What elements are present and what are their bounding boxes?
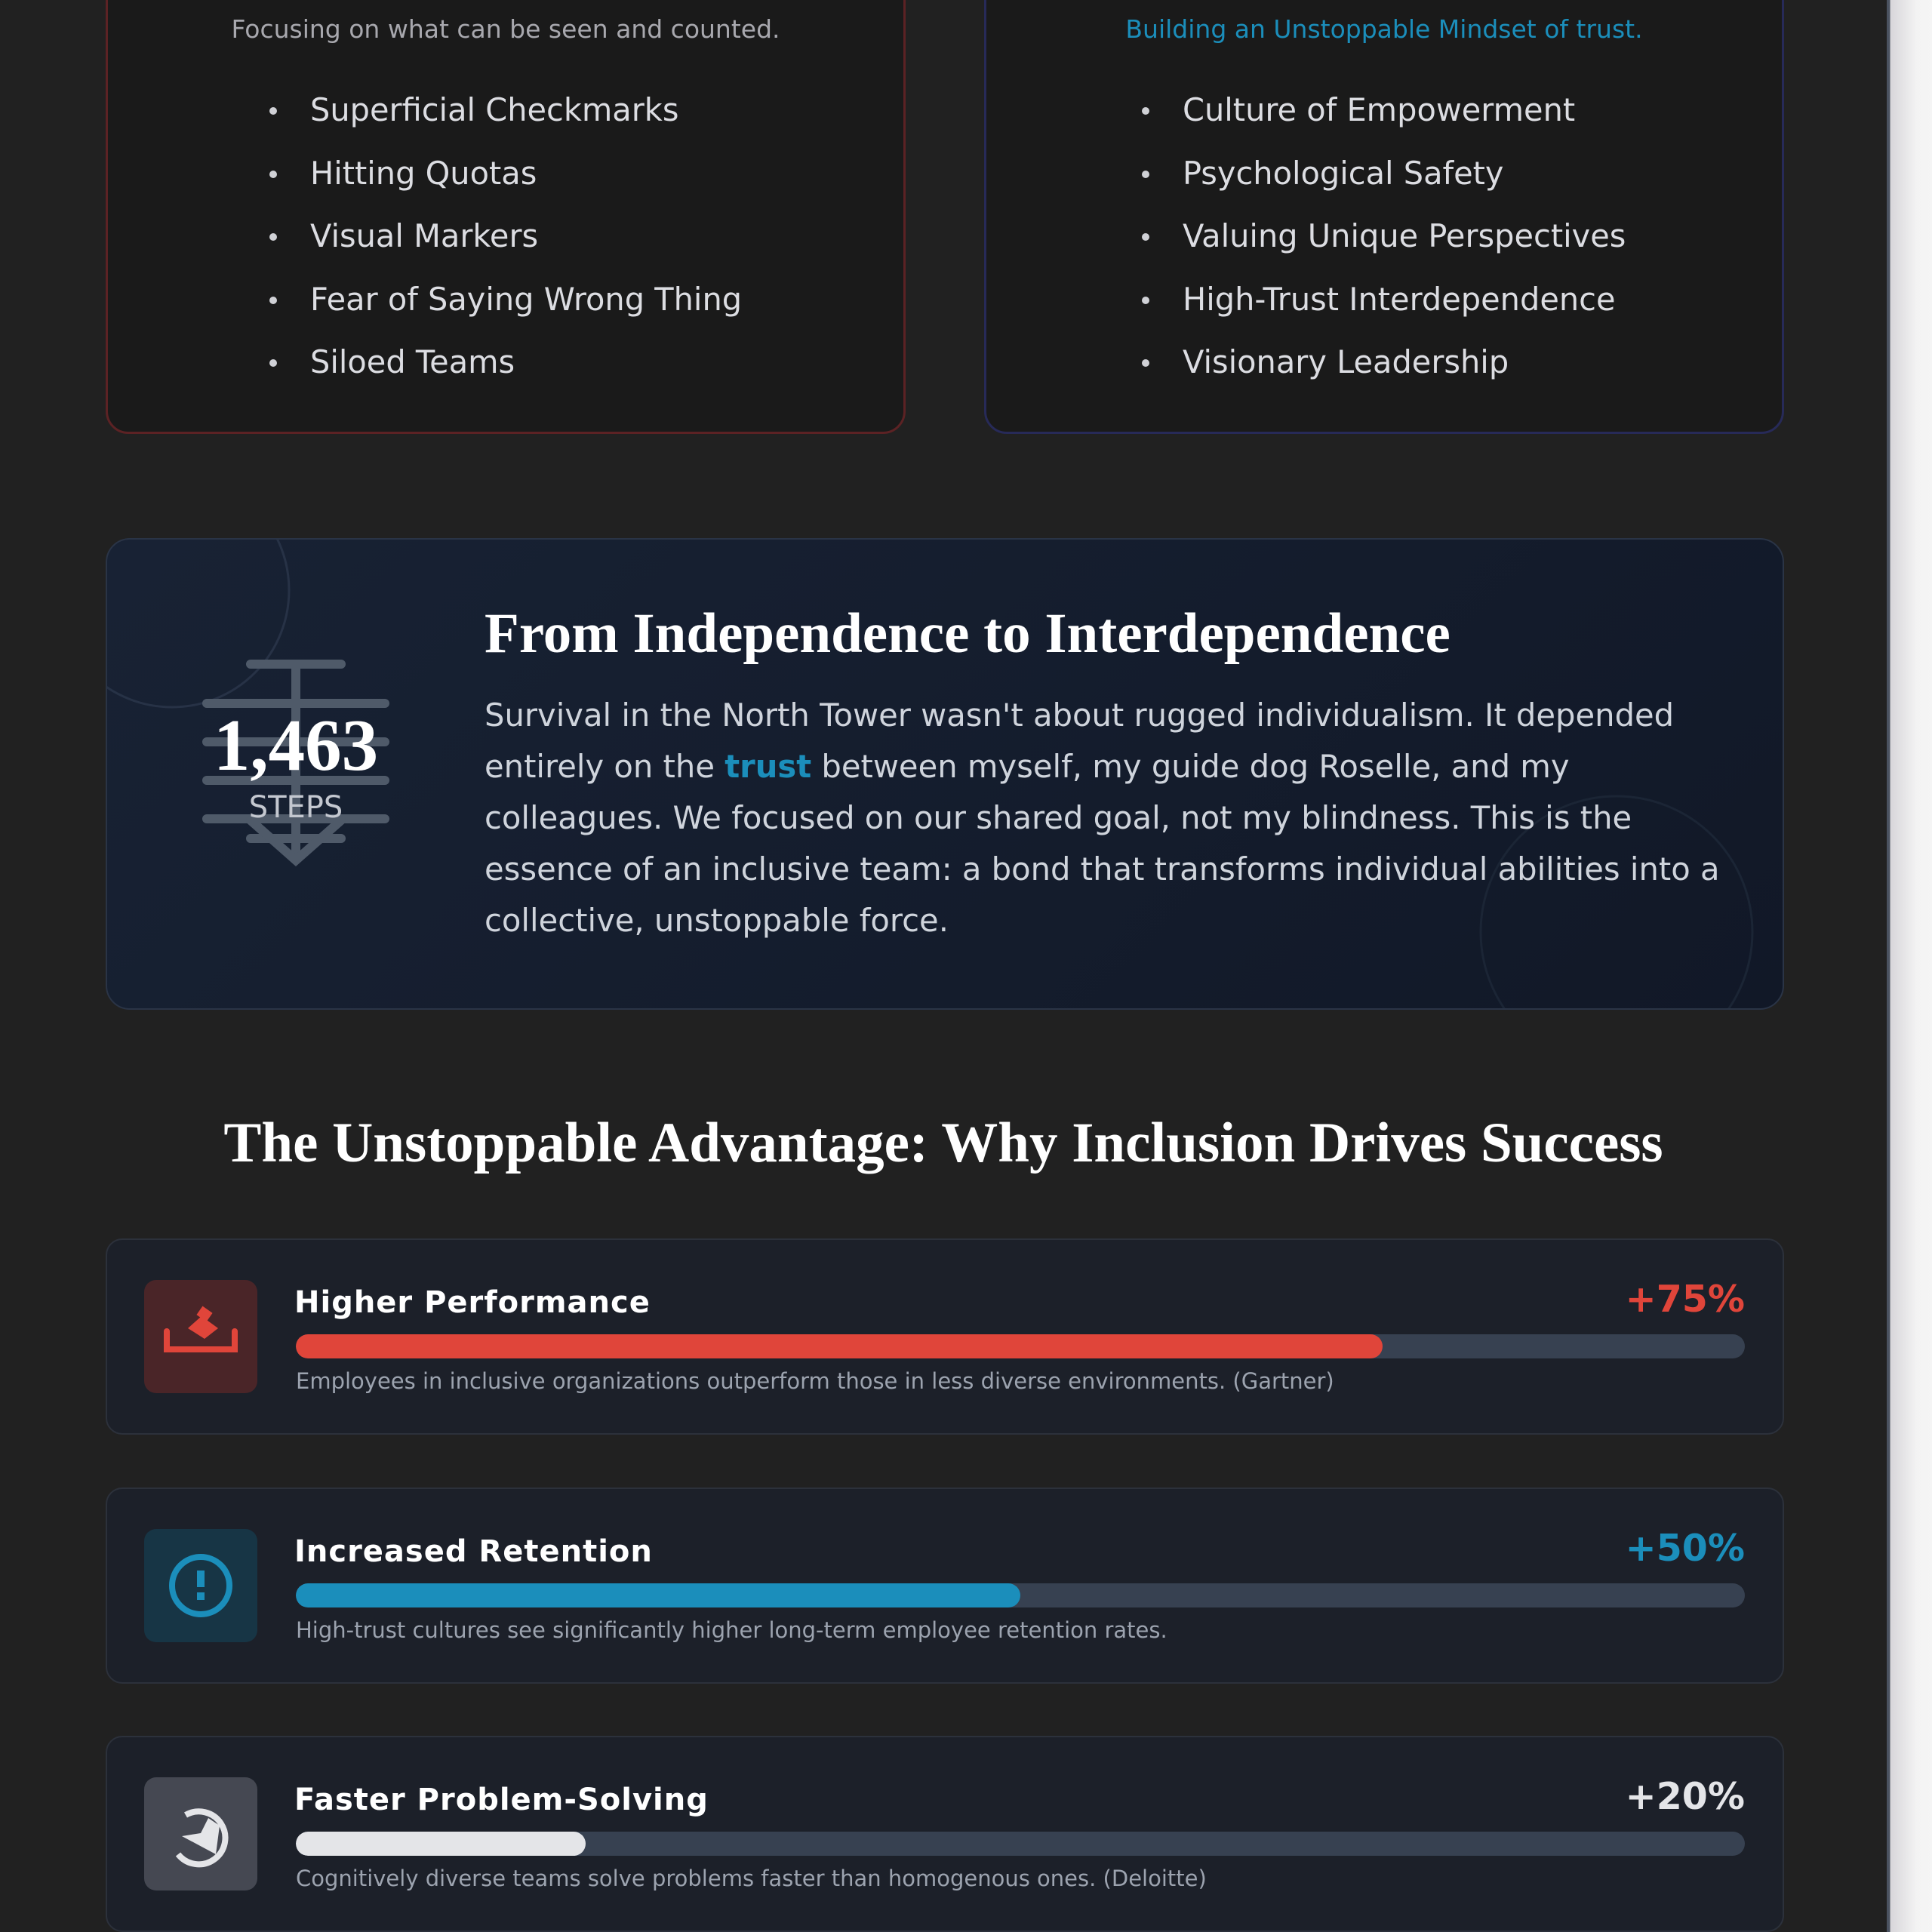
- icon: performance: [144, 1280, 257, 1393]
- panel: independence to interdependence: [106, 538, 1784, 1010]
- list left: Visual Markers: [310, 217, 538, 254]
- stat card: increased retention: +50%: [1626, 1527, 1745, 1570]
- list left: Siloed Teams: [310, 343, 515, 380]
- heading: From Independence to Interdependence: [485, 602, 1451, 665]
- stat card: faster problem-solving: [106, 1736, 1784, 1932]
- stat card: faster problem-solving: +20%: [1626, 1775, 1745, 1818]
- stat card: increased retention: [106, 1487, 1784, 1684]
- panel: superficial diversity: [106, 0, 906, 434]
- side scrollbar edge: [1887, 0, 1932, 1932]
- paragraph: Survival in the North Tower wasn't about rugged individualism. It depended entirely on the trust between myself, my guide dog Roselle, and my colleagues. We focused on our shared goal, not my blindness. This is the essence of an inclusive team: a bond that transforms individual abilities into a collective, unstoppable force.: [485, 697, 1720, 939]
- stat card: higher performance: Higher Performance: [294, 1285, 651, 1320]
- subtitle right: Building an Unstoppable Mindset of trust.: [1125, 14, 1643, 44]
- list right: High-Trust Interdependence: [1183, 281, 1616, 317]
- stat card: faster problem-solving: Cognitively diverse teams solve problems faster than homogenous ones. (Deloitte): [296, 1866, 1207, 1891]
- icon: stairs with steps count: [202, 660, 389, 866]
- icon: retention: [144, 1529, 257, 1642]
- icon: problem solving: [144, 1777, 257, 1890]
- list left: Fear of Saying Wrong Thing: [310, 281, 742, 317]
- stat number: 1,463: [214, 705, 378, 786]
- stat card: increased retention: High-trust cultures see significantly higher long-term employee retention rates.: [296, 1617, 1168, 1643]
- list right: Psychological Safety: [1183, 154, 1503, 192]
- stat card: higher performance: Employees in inclusive organizations outperform those in less diverse environments. (Gartner): [296, 1368, 1334, 1394]
- stat card: higher performance: +75%: [1626, 1278, 1745, 1321]
- list left: [269, 91, 742, 380]
- section title: The Unstoppable Advantage: Why Inclusion Drives Success: [223, 1112, 1663, 1174]
- panel: true inclusion: [984, 0, 1784, 434]
- stat label: STEPS: [249, 790, 343, 825]
- stat card: increased retention: Increased Retention: [294, 1534, 653, 1569]
- stat card: faster problem-solving: Faster Problem-Solving: [294, 1783, 709, 1817]
- subtitle left: Focusing on what can be seen and counted.: [231, 14, 780, 44]
- list right: Visionary Leadership: [1183, 343, 1509, 380]
- stat card: higher performance: [106, 1238, 1784, 1435]
- list right: Culture of Empowerment: [1183, 91, 1575, 128]
- list right: Valuing Unique Perspectives: [1183, 217, 1626, 254]
- list right: [1142, 91, 1626, 380]
- list left: Superficial Checkmarks: [310, 91, 678, 128]
- list left: Hitting Quotas: [310, 154, 537, 192]
